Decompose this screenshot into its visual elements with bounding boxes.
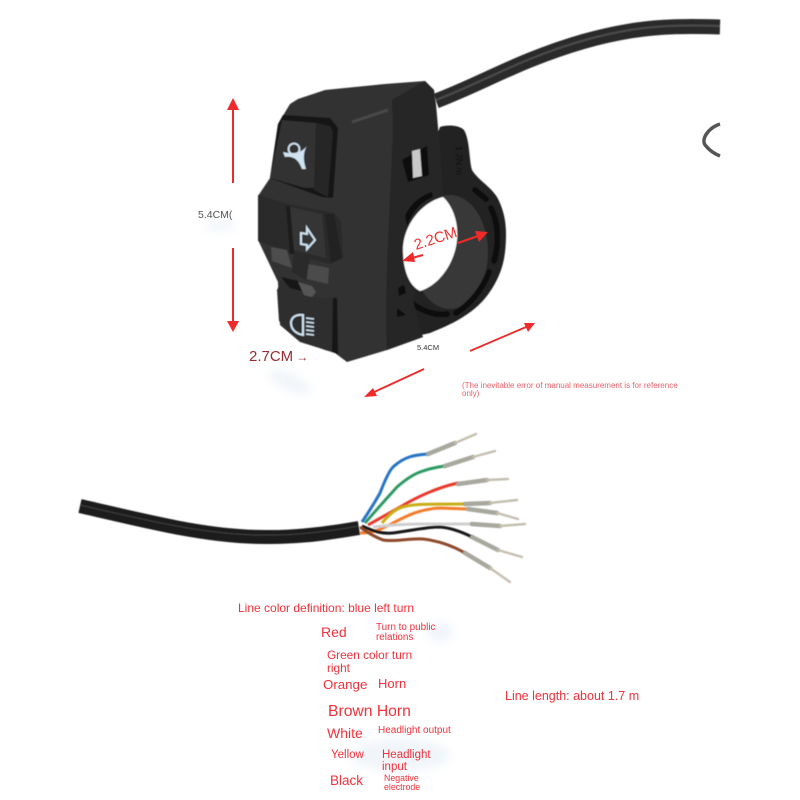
indicator windows: [271, 247, 329, 284]
wire colour definition: [238, 601, 451, 792]
upper bore window: [405, 192, 433, 226]
bore interior: [412, 195, 488, 309]
icon: headlight: [291, 315, 314, 335]
icon: horn: [283, 144, 307, 169]
headlight button: [277, 277, 338, 354]
black: electrode: [384, 782, 420, 792]
dimension: height arrow upper: [227, 98, 239, 183]
dimension: height arrow lower: [227, 248, 239, 332]
green: [327, 648, 412, 675]
main body: [258, 81, 443, 362]
black: [330, 773, 420, 792]
ring slots: [409, 190, 497, 314]
measurement note: (The inevitable error of manual measurement is for reference: [462, 381, 678, 390]
red: Turn to public: [376, 622, 436, 633]
side panel shading: [386, 81, 443, 350]
turn button: [258, 195, 343, 264]
orange: Horn: [378, 676, 406, 691]
orange: Orange: [323, 677, 367, 692]
yellow: input: [382, 761, 408, 773]
white: White: [327, 725, 363, 741]
yellow: Headlight: [382, 749, 431, 761]
red: Red: [321, 624, 347, 640]
sheathed cable: [80, 505, 359, 537]
black: Black: [330, 773, 363, 788]
dimension label: bore: 2.2CM: [412, 224, 459, 254]
orange: [323, 676, 406, 692]
yellow: Yellow: [331, 749, 365, 761]
lower clamp slot: [397, 285, 406, 317]
wires: [360, 454, 472, 553]
switch cable: [436, 25, 720, 101]
black: Negative: [384, 773, 419, 783]
dimension: depth arrow upper: [470, 323, 535, 351]
line length note: Line length: about 1.7 m: [505, 689, 639, 703]
white: Headlight output: [378, 725, 451, 736]
crimp terminals: [428, 434, 525, 582]
green: right: [327, 661, 351, 675]
wire harness: [80, 434, 525, 582]
horn button: [270, 115, 338, 198]
yellow: [331, 749, 431, 773]
dimension: bore arrow right: [458, 231, 488, 243]
measurement note: only): [462, 389, 480, 398]
clamp ring: [395, 126, 506, 338]
clamp molded text: 1 2N.m: [454, 146, 464, 175]
white: [327, 725, 451, 741]
heading: Line color definition: blue left turn: [238, 601, 414, 615]
metal tab: [402, 146, 429, 182]
measurement note: [462, 381, 678, 398]
white bore hole: [403, 197, 457, 291]
icon: arrow: [301, 228, 315, 249]
smudges: [204, 221, 454, 771]
dimension label: depth: 5.4CM: [417, 343, 439, 352]
dimension: depth arrow lower: [364, 369, 424, 397]
body highlight: [352, 110, 388, 122]
dimension label: height: 5.4CM(: [198, 209, 233, 221]
brown: Brown Horn: [328, 703, 411, 720]
cable fragment at right edge: [704, 124, 720, 156]
red: [321, 622, 436, 643]
dimension: bore arrow left: [402, 252, 423, 262]
red: relations: [376, 632, 413, 643]
green: Green color turn: [327, 648, 412, 662]
dimension label: width: 2.7CM→: [249, 348, 308, 365]
handlebar switch: [258, 81, 506, 362]
